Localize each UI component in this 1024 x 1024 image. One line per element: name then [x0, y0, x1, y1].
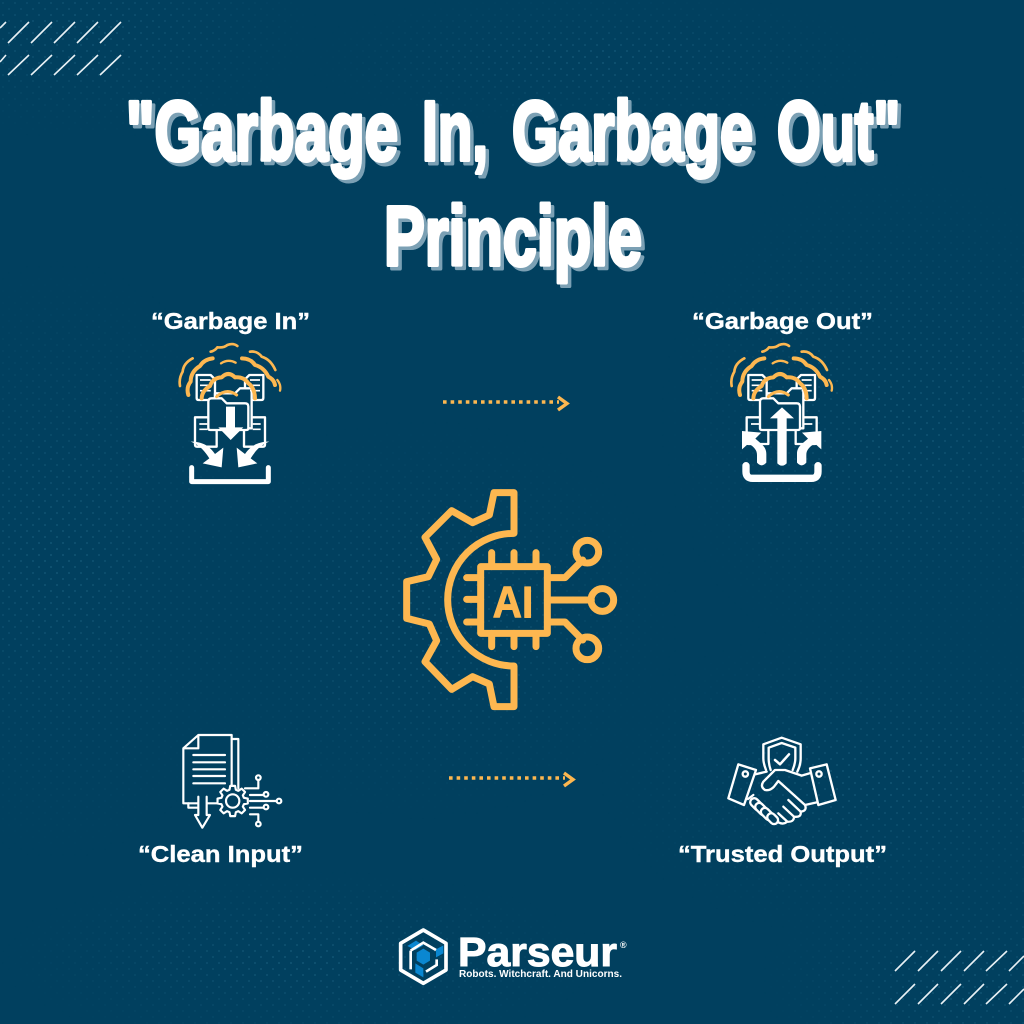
title: Principle — [388, 192, 646, 286]
icon: trusted output handshake — [728, 738, 836, 826]
arrow: clean input to trusted output — [449, 773, 573, 786]
title: Principle — [384, 189, 642, 283]
registered mark: ® — [620, 940, 627, 950]
title: "Garbage — [126, 84, 398, 178]
logo: Parseur — [401, 929, 627, 983]
title: Out" — [777, 84, 900, 178]
title: Garbage — [512, 84, 753, 178]
title: Out" — [780, 88, 904, 182]
chip label: AI — [493, 578, 533, 627]
label: Garbage Out: “Garbage Out” — [692, 308, 873, 334]
title: Garbage — [516, 88, 756, 182]
logo tagline: Robots. Witchcraft. And Unicorns. — [459, 968, 622, 980]
label: Garbage In: “Garbage In” — [151, 308, 310, 334]
icon: clean input — [183, 735, 281, 828]
title — [126, 84, 904, 286]
decorative stripes: bottom right — [895, 951, 1024, 1004]
arrow: garbage in to garbage out — [443, 397, 567, 410]
icon: garbage out — [731, 344, 832, 478]
label: Trusted Output: “Trusted Output” — [678, 841, 887, 867]
logo mark — [401, 930, 446, 983]
logo wordmark: Parseur — [458, 929, 617, 975]
title: In, — [426, 88, 492, 182]
icon: garbage in — [180, 344, 280, 482]
icon: AI gear and chip — [407, 493, 614, 707]
label: Clean Input: “Clean Input” — [138, 841, 303, 867]
decorative stripes: top left — [0, 22, 121, 75]
title: "Garbage — [130, 88, 402, 182]
title: In, — [422, 84, 488, 178]
